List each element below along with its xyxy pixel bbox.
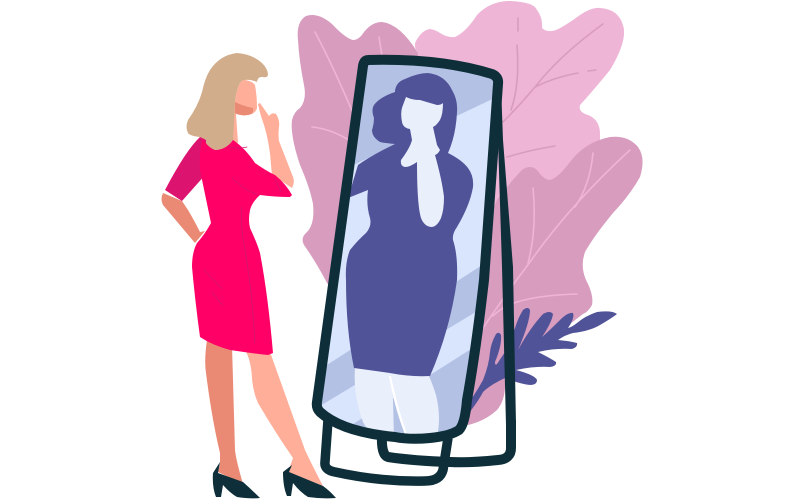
neck and face: [228, 80, 257, 143]
mirror stand: front leg: [325, 420, 448, 481]
leaf: left mauve: [292, 15, 420, 300]
leaf veins: lower right leaf: [483, 150, 630, 328]
mirror frame: [317, 60, 498, 439]
left leg: [205, 340, 243, 484]
woman: [162, 53, 336, 498]
reflection: legs: [355, 368, 439, 440]
leaf veins: upper right leaf: [503, 18, 603, 157]
right arm and hand: [258, 103, 294, 188]
fern sprig: [463, 308, 617, 418]
hair: [186, 53, 268, 150]
dress: [192, 138, 292, 355]
reflection: face, neck and arm: [401, 97, 444, 227]
right leg: [245, 350, 323, 486]
reflection: body and hair: [346, 73, 473, 376]
leaf veins: left leaf: [312, 32, 382, 142]
mirror stand: rear leg: [382, 80, 516, 462]
dress fold lines: [204, 147, 281, 343]
left shoe: [213, 462, 260, 498]
illustration: woman and mirror: [162, 1, 643, 498]
jaw shadow: [235, 102, 253, 115]
mirror: [310, 50, 505, 450]
leaf: lower right mauve: [440, 137, 643, 425]
leaf: upper right pink: [415, 1, 624, 260]
mirror glass: [317, 60, 498, 439]
left arm: [162, 193, 205, 243]
glass reflection bands: [322, 64, 493, 434]
background leaves: [292, 1, 643, 425]
dress sleeve: [165, 137, 206, 201]
right shoe: [283, 465, 336, 498]
